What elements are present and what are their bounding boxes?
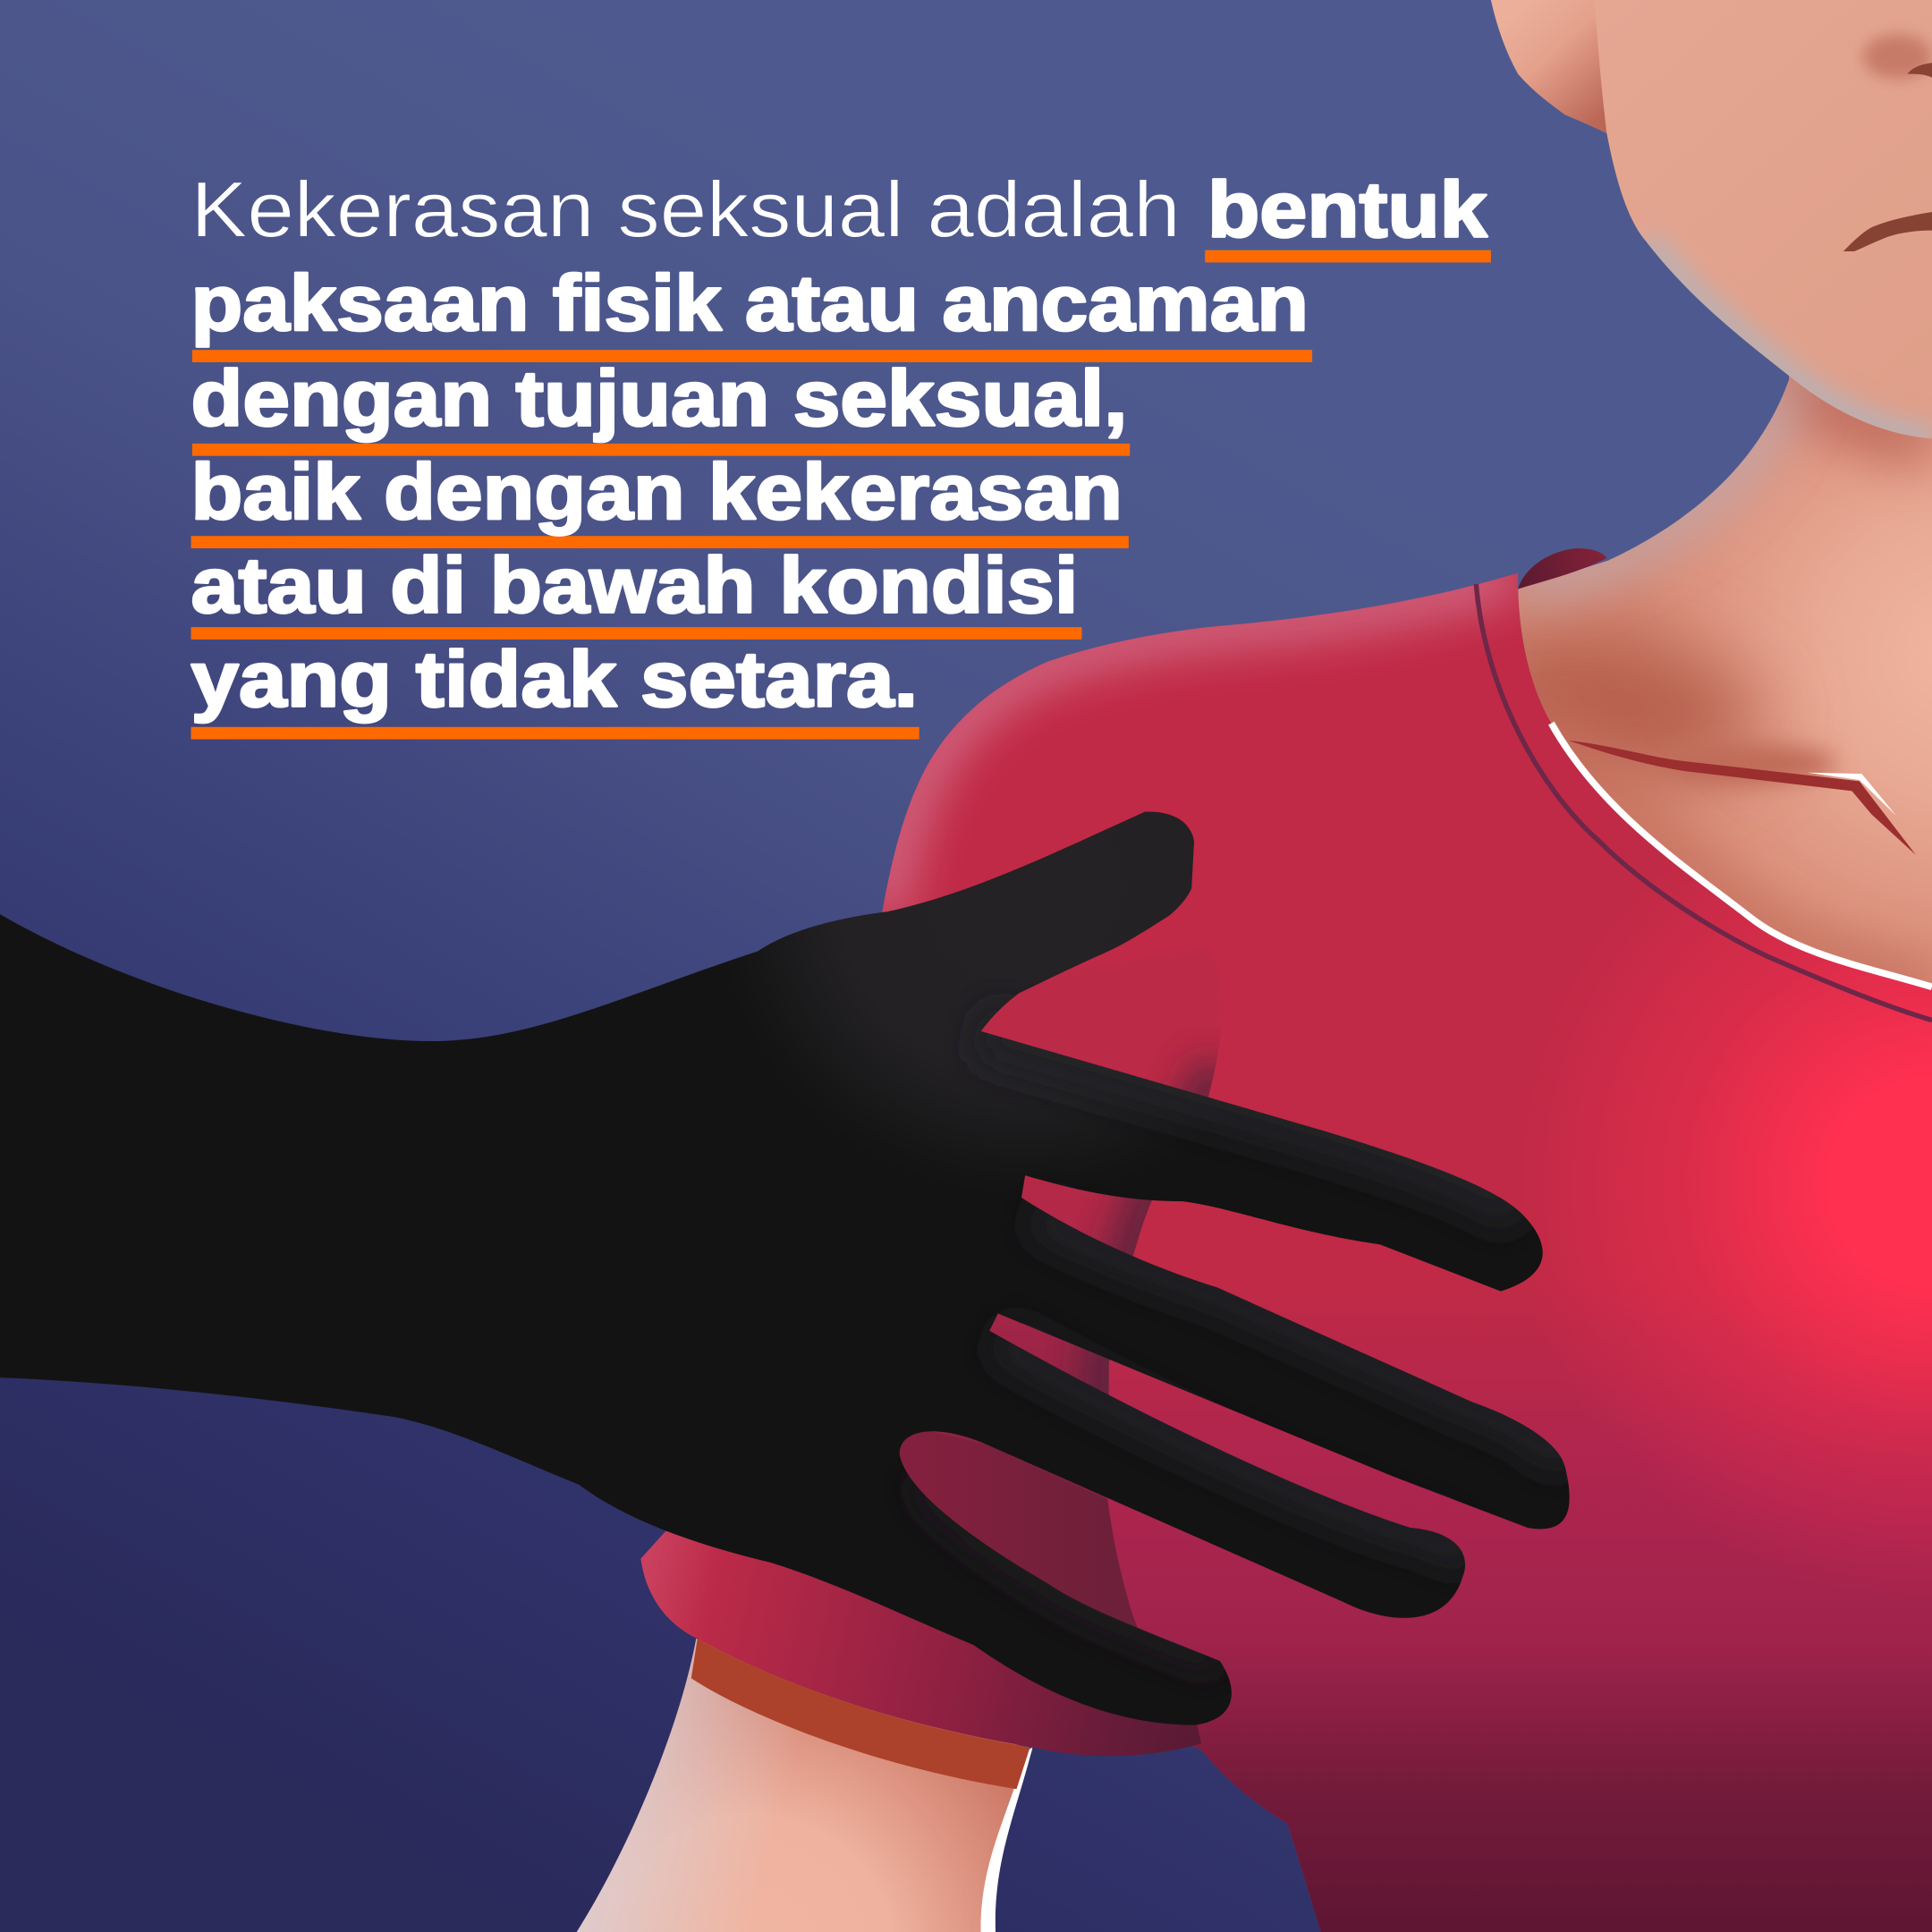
underline: line 6 [191,727,919,740]
underline: line 5 [191,627,1081,640]
shirt collar inner [1518,548,1606,589]
collar stitching line [1476,584,1932,1021]
orange sleeve cuff [691,1639,1030,1789]
black hand silhouette [0,812,1570,1725]
nose shadow [1863,35,1932,79]
neck [1518,376,1932,984]
forearm of person [577,1639,1032,1932]
white collar highlight [1551,724,1932,987]
underline: line 3 [192,444,1130,456]
face: chin and jaw [1491,0,1932,438]
white highlight on forearm [980,1747,1032,1932]
text: line 3: dengan tujuan seksual, [191,353,1127,442]
nostril [1907,63,1932,78]
shirt torso [862,573,1932,1932]
collarbone line [1569,741,1916,855]
text: line 5: atau di bawah kondisi [191,541,1078,630]
lower sleeve [640,1504,1201,1756]
underline: bentuk [1205,250,1491,262]
text: line 1 bold: bentuk [1208,165,1488,253]
statement text block [191,165,1491,740]
collarbone highlight [1808,773,1896,816]
underline: line 2 [192,350,1312,362]
underline: line 4 [191,536,1129,548]
mouth [1843,212,1932,251]
text: line 4: baik dengan kekerasan [191,447,1123,536]
text: line 1 light: Kekerasan seksual adalah [191,165,1181,253]
upper sleeve fold [900,1035,1220,1628]
text: line 6: yang tidak setara. [191,634,918,723]
text: line 2: paksaan fisik atau ancaman [191,258,1309,347]
